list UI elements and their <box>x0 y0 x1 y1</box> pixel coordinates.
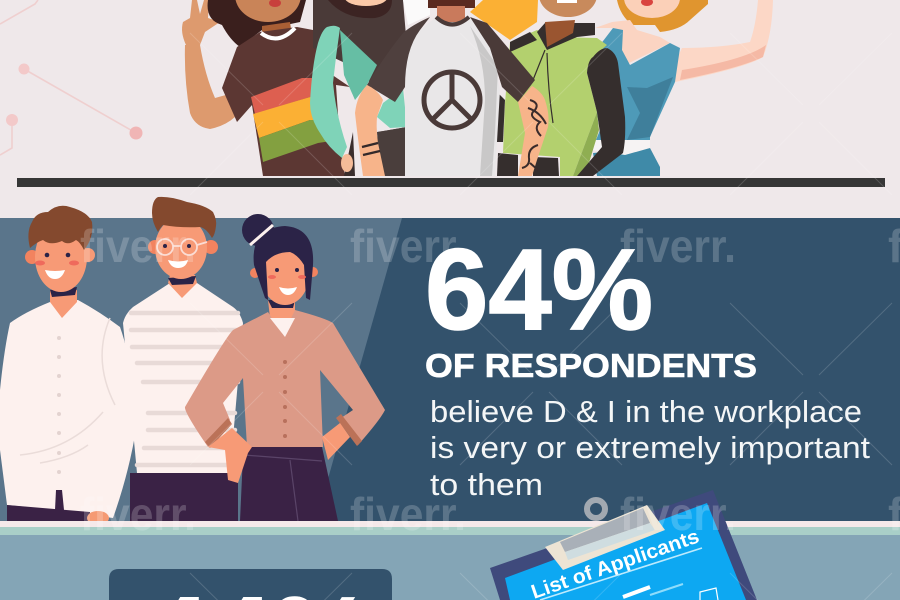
illustration: man in white shirt <box>0 206 137 525</box>
icon: peace symbol <box>424 72 480 128</box>
watermark text <box>80 220 900 540</box>
person: man in green vest <box>495 0 625 176</box>
person: man in brown striped tee <box>182 0 350 176</box>
text: description <box>430 394 870 502</box>
watermark crosses <box>190 33 892 600</box>
illustration: group of diverse people <box>182 0 773 176</box>
panel: top section background <box>0 0 900 218</box>
panel: lower statistic section <box>0 521 900 600</box>
panel: 64 percent statistic <box>0 197 900 525</box>
text: description: to them <box>430 467 543 502</box>
decorative circuit nodes <box>0 0 142 155</box>
heading: of respondents: OF RESPONDENTS <box>425 347 757 384</box>
person: man in peace-sign raglan shirt <box>355 0 549 176</box>
watermark text: fiverr. <box>620 488 736 540</box>
illustration: man with glasses in striped sweater <box>123 197 243 521</box>
watermark text: fiverr. <box>80 220 196 272</box>
person: woman in blue dress <box>590 0 773 176</box>
watermark text: fiverr. <box>350 220 466 272</box>
illustration: woman in pink blouse <box>185 214 385 521</box>
text: description: is very or extremely important <box>430 430 870 465</box>
stat: 64%: 64% <box>425 226 653 354</box>
text: description: believe D & I in the workplace <box>430 394 862 429</box>
light beam behind people <box>0 218 402 521</box>
watermark text: fiverr. <box>620 220 736 272</box>
ground bar <box>17 178 885 187</box>
icon: clipboard with list of applicants <box>490 490 757 600</box>
stat card <box>109 569 392 600</box>
person: woman in hijab and teal top <box>310 0 408 176</box>
person: yellow shirt at the back <box>470 0 538 40</box>
tattoo on forearm <box>522 100 546 170</box>
watermark text: fiverr. <box>350 488 466 540</box>
watermark text: fiverr. <box>80 488 196 540</box>
